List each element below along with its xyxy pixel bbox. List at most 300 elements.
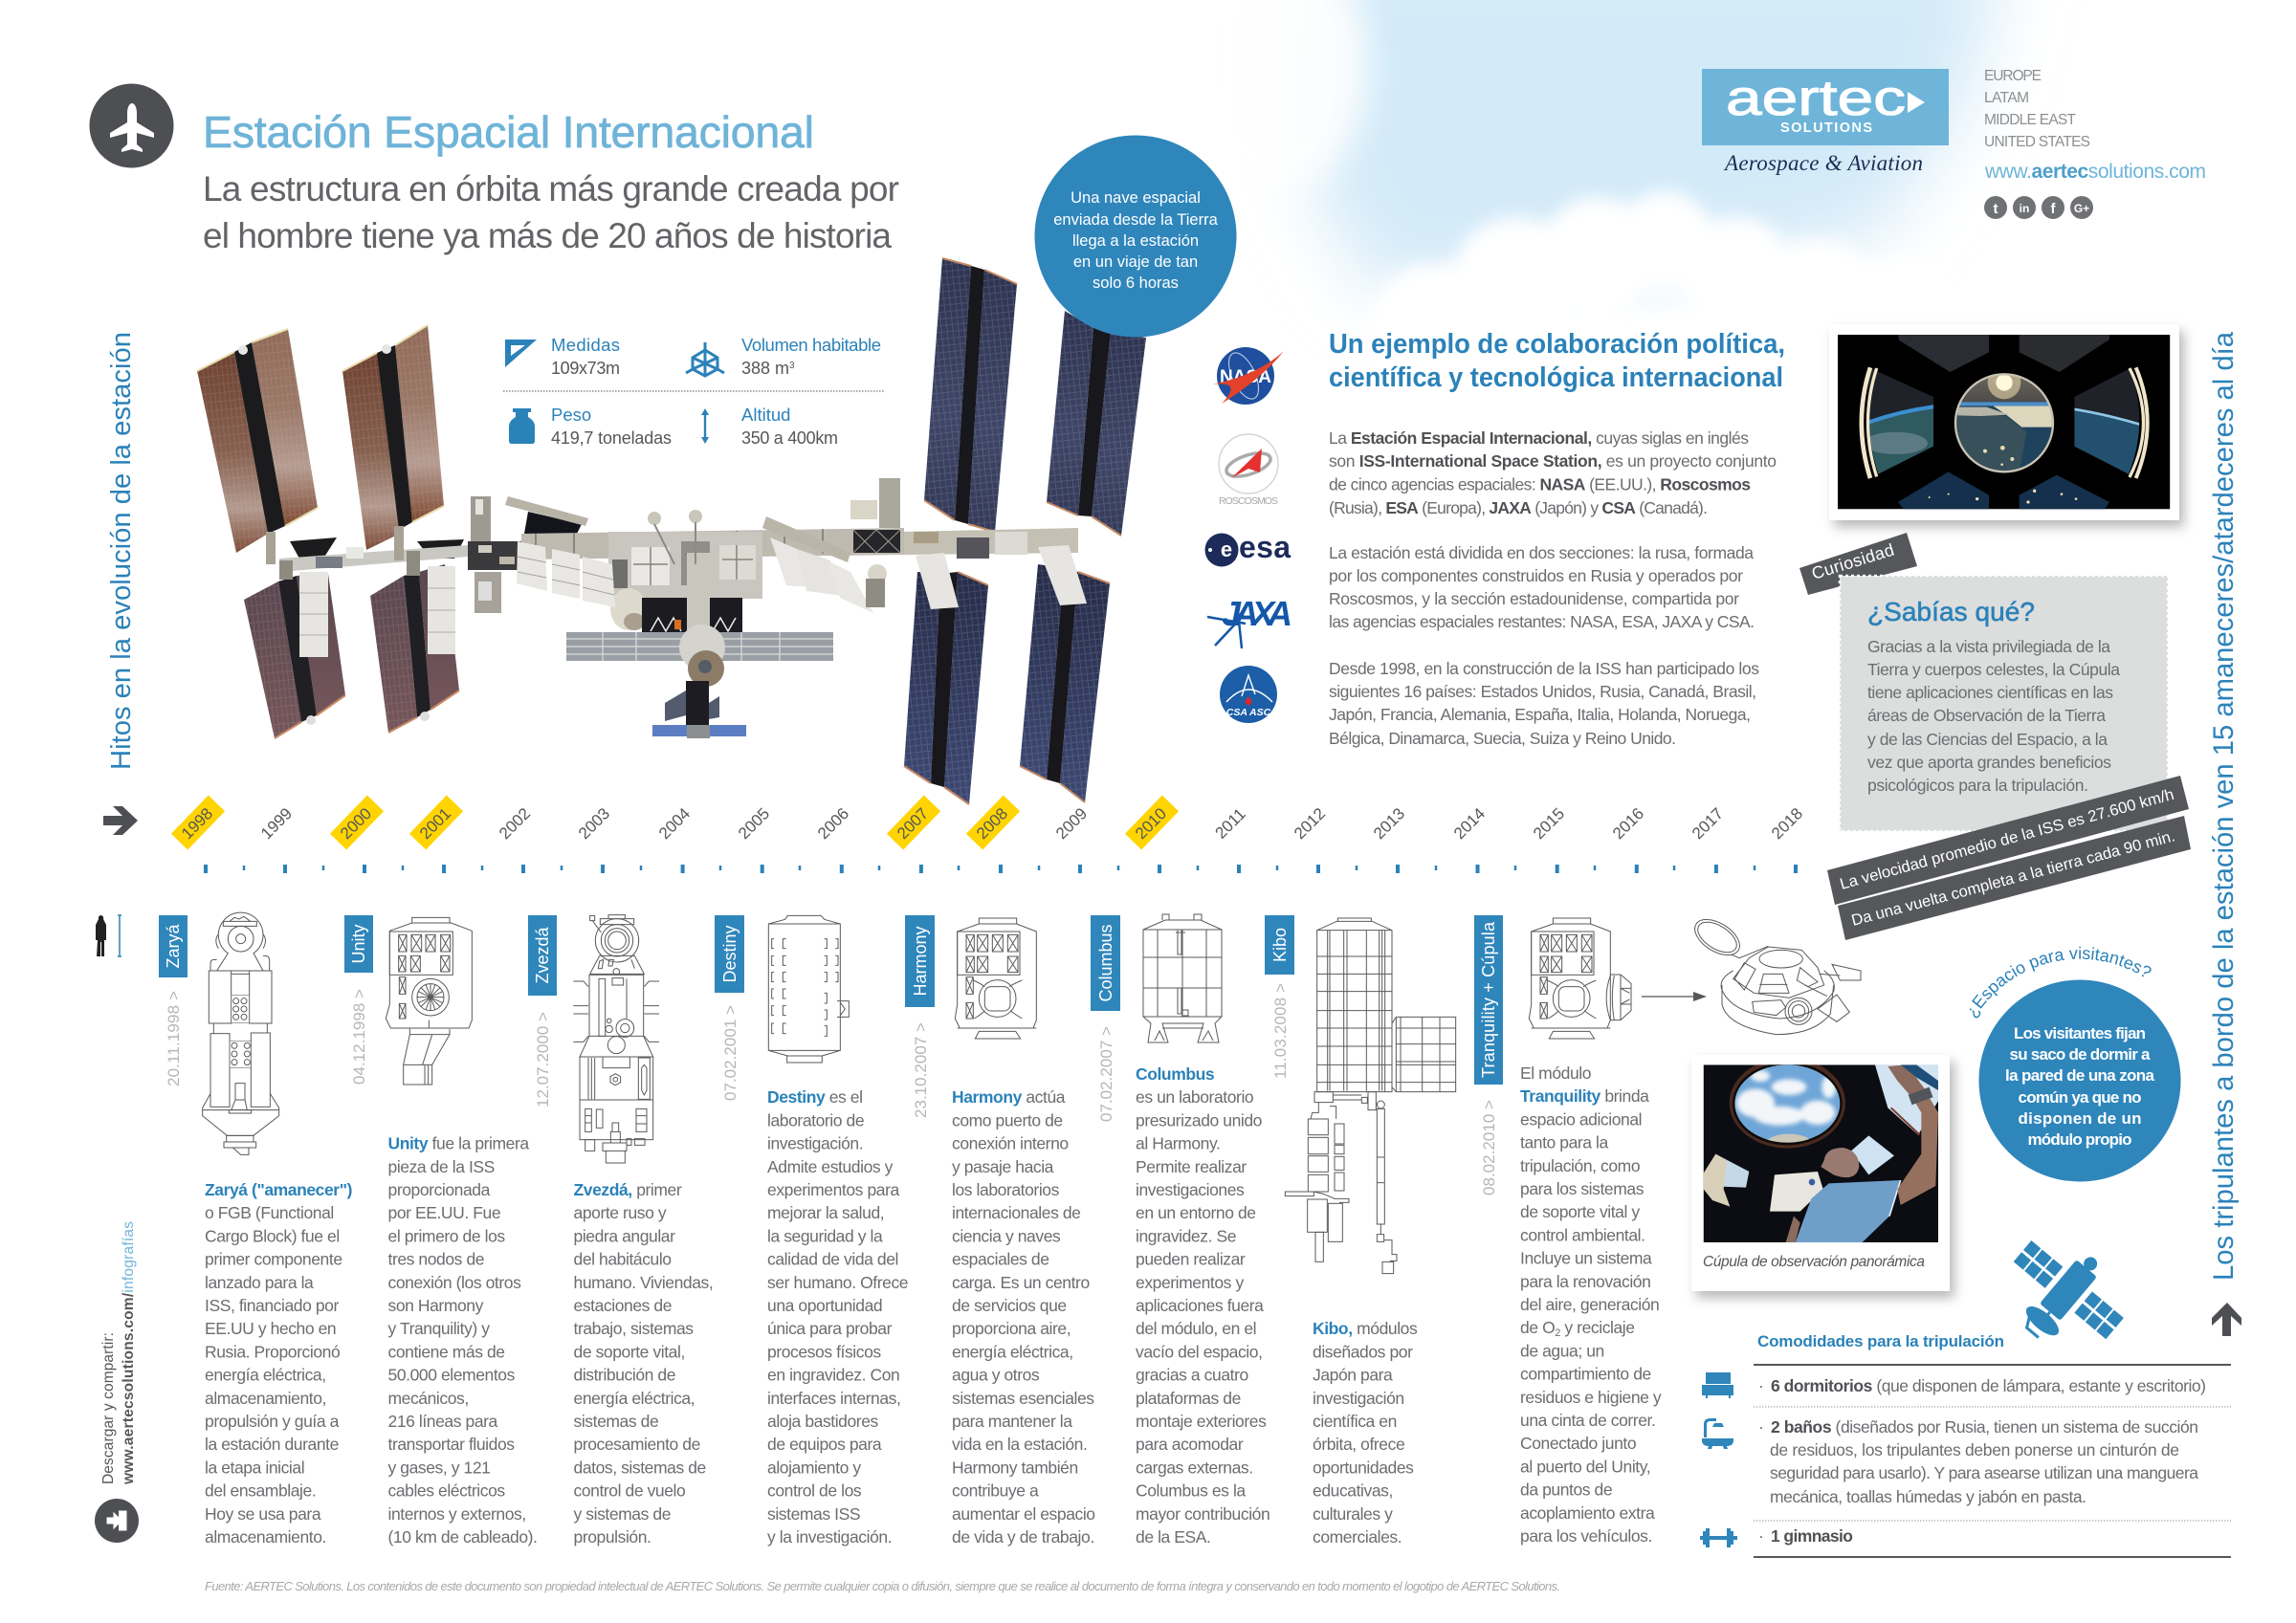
text: Unity: el primero de los [388,1226,505,1245]
text: Harmony: para mantener la [952,1412,1072,1431]
text: Harmony: los laboratorios [952,1180,1060,1199]
date: 08.02.2010 > [1480,1100,1498,1195]
banner: orbit period: Da una vuelta completa a la tierra cada 90 min. [1849,827,2176,930]
text block: about the station: (Rusia), ESA (Europa), JAXA (Japón) y CSA (Canadá). [1329,498,1708,517]
logo: Roscosmos [1219,434,1278,507]
text: Harmony: Harmony también [952,1458,1078,1477]
year labels: 2005 [735,804,773,843]
text: Columbus: Columbus [1136,1064,1215,1084]
banner: orbital speed: La velocidad promedio de la ISS es 27.600 km/h [1838,786,2175,893]
text: Columbus: gracias a cuatro [1136,1366,1248,1385]
tick marks [206,865,1796,873]
logo: ESA [1205,530,1291,566]
date: 07.02.2001 > [721,1005,740,1101]
vertical heading: milestones: Hitos en la evolución de la estación [106,332,137,770]
text: Unity: cables eléctricos [388,1481,505,1501]
module: Kibo [1265,915,1456,1546]
text block: about the station: de cinco agencias espaciales: NASA (EE.UU.), Roscosmos [1329,474,1751,493]
stat: altitude: 350 a 400km [741,428,838,448]
drawing: Zvezdá module [573,915,659,1163]
text: Zvezdá: del habitáculo [574,1250,672,1269]
text: Zvezdá: y sistemas de [574,1504,671,1524]
icon: weight [509,408,535,444]
year labels: 2009 [1052,804,1091,843]
icon: altitude arrow [701,408,709,444]
module: Columbus [1091,914,1269,1546]
text: Kibo: educativas, [1313,1481,1393,1501]
solar array: lower left 1 [244,574,345,738]
text: Unity: por EE.UU. Fue [388,1203,500,1222]
label: Harmony [905,915,935,1007]
text: Zaryá: la etapa inicial [205,1458,304,1477]
text: Unity: (10 km de cableado). [388,1527,538,1546]
background: sky and clouds [1177,0,2009,430]
text: Destiny: una oportunidad [767,1296,882,1315]
text: Unity: internos y externos, [388,1504,526,1524]
title: Estación Espacial Internacional [203,107,814,157]
drawing: Cúpula [1689,912,1861,1035]
subtitle [203,169,899,255]
date: 07.02.2007 > [1097,1026,1115,1122]
logo: NASA: NASA [1220,367,1271,387]
logo: aertec solutions [1702,69,1949,175]
text: Tranquility: al puerto del Unity, [1520,1457,1650,1476]
text: Kibo: culturales y [1313,1504,1393,1524]
logo: NASA [1212,347,1284,405]
solar array: lower right 1 [904,572,988,804]
date: 12.07.2000 > [534,1012,552,1108]
text: Unity: tres nodos de [388,1250,484,1269]
text: Harmony: vida en la estación. [952,1435,1087,1454]
panel: crew amenities [1700,1332,2231,1557]
icon: bath [1702,1418,1733,1449]
text: Destiny: de equipos para [767,1435,882,1454]
callout: visitors: común ya que no [2019,1088,2141,1107]
text: Unity: pieza de la ISS [388,1157,495,1176]
text: Kibo: oportunidades [1313,1458,1414,1477]
text: Destiny: investigación. [767,1134,863,1153]
module: Tranquility and Cúpula [1474,915,1662,1546]
label: Unity [344,915,373,973]
text: Columbus: experimentos y [1136,1273,1244,1292]
stat: weight [551,405,672,448]
text: Destiny: única para probar [767,1319,893,1338]
text: Zaryá: Zaryá ("amanecer") [205,1180,352,1199]
drawing: Harmony node [955,918,1036,1039]
date: 23.10.2007 > [912,1022,930,1118]
text: Destiny: calidad de vida del [767,1250,898,1269]
text: Zaryá: primer componente [205,1250,342,1269]
social icons: in [2020,202,2029,215]
icon: download badge [95,1499,139,1543]
text: Destiny: la seguridad y la [767,1226,883,1245]
subtitle: el hombre tiene ya más de 20 años de historia [203,216,892,255]
text: Tranquility: de soporte vital y [1520,1202,1640,1221]
photo card: cupola window view [1829,324,2179,520]
drawing: Tranquility node with cupola [1529,918,1631,1039]
year labels: 2007 [894,804,932,843]
solar array: lower right 2 [1020,564,1110,802]
text: Destiny: y la investigación. [767,1527,892,1546]
label: Zaryá [159,915,188,977]
year labels: 2008 [973,804,1011,843]
text: Zvezdá: energía eléctrica, [574,1389,695,1408]
solar array: upper left 1 [197,329,318,553]
text: Zvezdá: propulsión. [574,1527,651,1546]
module: Zaryá [159,912,352,1546]
callout: visitors: disponen de un [2019,1109,2141,1128]
logo: CSA: CSA ASC [1226,707,1271,718]
tag: curiosity [1799,533,1917,595]
year labels: 2016 [1609,804,1647,843]
text: Columbus: en un entorno de [1136,1203,1256,1222]
logo: aertec solutions: aertec [1726,71,1906,126]
social icons [1984,196,2093,219]
year labels: 1999 [257,804,296,843]
callout: journey time: llega a la estación [1072,232,1199,250]
year labels: 2013 [1370,804,1408,843]
callout: journey time: en un viaje de tan [1073,253,1198,271]
callout: journey time: Una nave espacial [1071,189,1201,207]
text: Columbus: mayor contribución [1136,1504,1269,1524]
drawing: Zaryá module [203,912,279,1154]
stat: altitude [741,405,838,448]
text: Columbus: pueden realizar [1136,1250,1246,1269]
panel: did you know [1840,576,2168,831]
text: Zvezdá: distribución de [574,1366,675,1385]
divider [503,390,884,392]
callout: journey time: solo 6 horas [1093,274,1179,292]
text: Tranquility: para los vehículos. [1520,1526,1652,1546]
icon: set square [505,340,537,367]
text: Tranquility: y reciclaje [1560,1318,1635,1337]
section heading: collaboration [1329,329,1785,393]
callout: journey time [1035,136,1236,337]
regions list: LATAM [1984,90,2029,106]
text: Columbus: al Harmony. [1136,1134,1220,1153]
text: Zvezdá: sistemas de [574,1412,658,1431]
text: Kibo: Japón para [1313,1366,1393,1385]
icon: dumbbell [1700,1528,1737,1547]
stat: measurements [551,335,620,378]
text: Tranquility: acoplamiento extra [1520,1503,1655,1523]
text: Harmony: Harmony actúa [952,1087,1065,1107]
text: Zaryá: energía eléctrica, [205,1366,326,1385]
text: Tranquility: da puntos de [1520,1480,1612,1500]
arrow: up [2212,1303,2241,1336]
social icons: G+ [2074,202,2089,215]
item: bathrooms: mecánica, toallas húmedas y jabón en pasta. [1770,1487,2086,1506]
logo: aertec solutions: Aerospace & Aviation [1723,151,1923,175]
text: Kibo: órbita, ofrece [1313,1435,1404,1454]
text: Tranquility: Tranquility brinda [1520,1086,1648,1106]
text: Destiny: Admite estudios y [767,1157,894,1176]
social icons: f [2051,201,2057,217]
text block: about the station: Japón, Francia, Alemania, España, Italia, Holanda, Noruega, [1329,705,1751,724]
text: Tranquility: espacio adicional [1520,1109,1642,1129]
date: 20.11.1998 > [165,991,183,1086]
text: Zvezdá: de soporte vital, [574,1342,685,1361]
drawing: Kibo laboratory [1285,918,1456,1274]
regions list: MIDDLE EAST [1984,112,2077,128]
truss and modules [266,478,1087,738]
solar array: lower left 2 [370,564,459,733]
text: Harmony: internacionales de [952,1203,1080,1222]
text: Columbus: del módulo, en el [1136,1319,1256,1338]
regions list [1984,68,2090,150]
stat: habitable volume: Volumen habitable [741,335,881,355]
label: Kibo [1265,915,1294,975]
item: bathrooms: de residuos, los tripulantes deben ponerse un cinturón de [1770,1440,2179,1459]
label: Destiny: Destiny [720,925,740,983]
text: Columbus: Permite realizar [1136,1157,1247,1176]
text: Harmony: energía eléctrica, [952,1342,1073,1361]
item: bathrooms: 2 baños (diseñados por Rusia, tienen un sistema de succión [1771,1417,2198,1437]
text: Zaryá: Rusia. Proporcionó [205,1342,340,1361]
text: Zvezdá: procesamiento de [574,1435,700,1454]
text: Destiny: en ingravidez. Con [767,1366,899,1385]
text: Columbus: Columbus es la [1136,1481,1246,1501]
year markers [171,796,1179,849]
text: Destiny: ser humano. Ofrece [767,1273,908,1292]
label: Columbus: Columbus [1096,924,1115,1002]
year labels: 2018 [1768,804,1806,843]
stat: measurements: Medidas [551,335,620,355]
date: 11.03.2008 > [1271,983,1290,1079]
text: Kibo: investigación [1313,1389,1404,1408]
icon: human scale [96,915,121,956]
text: Unity: mecánicos, [388,1389,469,1408]
text: Tranquility: Conectado junto [1520,1434,1636,1453]
date: 04.12.1998 > [350,989,368,1085]
text: Tranquility: control ambiental. [1520,1225,1645,1244]
download link [95,1221,139,1543]
text: Unity: y gases, y 121 [388,1458,490,1477]
text: download and share: www.aertecsolutions.com/infografías [121,1221,137,1485]
key figures panel [503,335,884,448]
text: Destiny: alojamiento y [767,1458,861,1477]
text: Harmony: como puerto de [952,1110,1063,1130]
label: Kibo: Kibo [1270,928,1290,962]
text: Destiny: Destiny es el [767,1087,863,1107]
text: Unity: 216 líneas para [388,1412,498,1431]
text: Zaryá: almacenamiento. [205,1527,326,1546]
text block: about the station: La estación está dividida en dos secciones: la rusa, formada [1329,543,1754,562]
item: bathrooms [1758,1417,2198,1506]
label: Columbus [1091,915,1120,1011]
label: Unity: Unity [349,924,368,964]
text: Tranquility: El módulo [1520,1064,1591,1083]
text: Unity: transportar fluidos [388,1435,515,1454]
text: Destiny: control de los [767,1481,862,1501]
text: Unity: conexión (los otros [388,1273,521,1292]
text: Tranquility: compartimiento de [1520,1365,1651,1384]
logo: CSA [1220,666,1277,723]
section heading: collaboration: científica y tecnológica internacional [1329,362,1783,393]
text: Unity: son Harmony [388,1296,484,1315]
stat: weight: 419,7 toneladas [551,428,672,448]
year labels: 2006 [814,804,852,843]
logo: aertec solutions: SOLUTIONS [1780,121,1872,136]
text: Tranquility: para los sistemas [1520,1179,1645,1198]
drawing: Destiny laboratory [768,915,849,1063]
text: Zaryá: Cargo Block) fue el [205,1226,340,1245]
text: did you know: Tierra y cuerpos celestes, la Cúpula [1867,660,2120,679]
year labels: 2003 [575,804,613,843]
text: download and share [100,1221,137,1485]
label: Zvezdá: Zvezdá [533,926,552,984]
text: Tranquility: de O [1520,1318,1635,1339]
solar array: upper right 1 [924,258,1017,532]
year labels: 2010 [1132,804,1170,843]
text: Columbus: es un laboratorio [1136,1087,1253,1107]
text: Unity: Unity fue la primera [388,1134,529,1153]
tag: curiosity: Curiosidad [1809,540,1896,583]
text: Unity: contiene más de [388,1342,505,1361]
text: Zvezdá: piedra angular [574,1226,675,1245]
text: Tranquility: residuos e higiene y [1520,1388,1662,1407]
text block: about the station: Bélgica, Dinamarca, Suecia, Suiza y Reino Unido. [1329,729,1676,748]
text: Harmony: conexión interno [952,1134,1069,1153]
callout: visitors: su saco de dormir a [2009,1045,2151,1064]
callout: journey time: enviada desde la Tierra [1053,211,1219,229]
year labels: 2017 [1689,804,1727,843]
module: Harmony [905,915,1095,1546]
text: Destiny: interfaces internas, [767,1389,900,1408]
text: Zvezdá: aporte ruso y [574,1203,667,1222]
year labels: 2002 [496,804,534,843]
text: Zvezdá: trabajo, sistemas [574,1319,694,1338]
label: Zaryá: Zaryá [164,924,183,969]
module: Unity [344,915,538,1546]
text block: about the station: La Estación Espacial Internacional, cuyas siglas en inglés [1329,428,1749,448]
label: Tranquility + Cúpula: Tranquility + Cúpula [1479,921,1498,1078]
heading: did you know: ¿Sabías qué? [1867,597,2035,626]
callout: visitors: Los visitantes fijan [2014,1024,2146,1042]
heading: amenities: Comodidades para la tripulación [1757,1332,2004,1350]
text: Zvezdá: control de vuelo [574,1481,685,1501]
text: Destiny: laboratorio de [767,1110,864,1130]
stat: habitable volume: 388 m [741,359,789,378]
text: Harmony: de servicios que [952,1296,1067,1315]
arrow: timeline direction [103,806,138,835]
year labels: 1998 [178,804,216,843]
text: Unity: y Tranquility) y [388,1319,490,1338]
text block: about the station: Desde 1998, en la construcción de la ISS han participado los [1329,659,1759,678]
text: Harmony: agua y otros [952,1366,1040,1385]
label: Zvezdá [528,915,557,996]
item: bathrooms: seguridad para usarlo). Y para asearse utilizan una manguera [1770,1463,2198,1482]
icon: habitable volume [686,342,724,376]
text: Zvezdá: datos, sistemas de [574,1458,706,1477]
text: Tranquility: de agua; un [1520,1341,1604,1360]
text: Destiny: sistemas ISS [767,1504,860,1524]
text: Kibo: científica en [1313,1412,1397,1431]
callout: visitors [1978,979,2181,1182]
label: Tranquility + Cúpula [1474,915,1503,1085]
text: Destiny: procesos físicos [767,1342,881,1361]
text: Zaryá: del ensamblaje. [205,1481,316,1501]
photo card: astronaut in the Cúpula [1691,1055,1950,1291]
text: did you know: y de las Ciencias del Espacio, a la [1867,730,2108,749]
text: Columbus: aplicaciones fuera [1136,1296,1264,1315]
stat: habitable volume [741,335,881,378]
timeline [171,796,1806,873]
stat: altitude: Altitud [741,405,790,425]
text: Tranquility: una cinta de correr. [1520,1411,1655,1430]
text: Tranquility: 2 [1555,1327,1560,1339]
stat: weight: Peso [551,405,591,425]
year labels: 2004 [655,804,694,843]
text block: about the station: son ISS-International Space Station, es un proyecto conjunto [1329,451,1777,471]
text: Harmony: proporciona aire, [952,1319,1071,1338]
social icons: t [1994,201,1998,217]
text: Kibo: diseñados por [1313,1342,1413,1361]
text: Destiny: aloja bastidores [767,1412,879,1431]
text: Kibo: Kibo, módulos [1313,1319,1417,1338]
text: did you know: psicológicos para la tripulación. [1867,776,2088,795]
arrow: module to cupola [1642,992,1707,1001]
item: gym: · [1758,1526,1764,1546]
text: Zaryá: ISS, financiado por [205,1296,339,1315]
item: bedrooms: 6 dormitorios (que disponen de lámpara, estante y escritorio) [1771,1376,2206,1395]
text: Tranquility: del aire, generación [1520,1295,1659,1314]
logo: ESA: e [1221,537,1232,561]
item: gym: 1 gimnasio [1771,1526,1853,1546]
text: Destiny: experimentos para [767,1180,899,1199]
text: Harmony: carga. Es un centro [952,1273,1090,1292]
year labels: 2001 [416,804,454,843]
year labels: 2012 [1291,804,1329,843]
text: Columbus: de la ESA. [1136,1527,1211,1546]
stat: measurements: 109x73m [551,359,620,378]
text: Zvezdá: Zvezdá, primer [574,1180,681,1199]
text: Zaryá: almacenamiento, [205,1389,326,1408]
label: Destiny [715,915,744,993]
logo: ESA: esa [1239,530,1291,564]
text: Tranquility: tripulación, como [1520,1156,1640,1175]
callout: visitors: la pared de una zona [2005,1066,2155,1085]
text: did you know: tiene aplicaciones científicas en las [1867,683,2113,702]
curved heading: space for visitors: ¿Espacio para visitantes? [1969,947,2152,1018]
text: Columbus: ingravidez. Se [1136,1226,1236,1245]
year labels: 2000 [337,804,375,843]
text: Columbus: montaje exteriores [1136,1412,1267,1431]
subtitle: La estructura en órbita más grande creada por [203,169,899,208]
text: download and share: Descargar y compartir: [100,1332,117,1484]
year labels: 2015 [1530,804,1568,843]
text: Tranquility: tanto para la [1520,1133,1609,1152]
text: Zaryá: propulsión y guía a [205,1412,340,1431]
vertical heading: crew sunrises: Los tripulantes a bordo de la estación ven 15 amaneceres/atardeceres al día [2208,332,2240,1281]
text: Zvezdá: estaciones de [574,1296,672,1315]
year labels: 2011 [1211,804,1249,843]
text: Harmony: y pasaje hacia [952,1157,1054,1176]
text block: about the station [1329,428,1777,748]
solar array: upper right 2 [1047,311,1146,536]
item: bedrooms: · [1758,1376,1764,1395]
text block: about the station: siguientes 16 países: Estados Unidos, Rusia, Canadá, Brasil, [1329,682,1756,701]
text: Harmony: aumentar el espacio [952,1504,1095,1524]
illustration: International Space Station [197,258,1146,804]
icon: airplane badge [90,84,174,168]
text: Zaryá: Hoy se usa para [205,1504,321,1524]
text: Columbus: vacío del espacio, [1136,1342,1263,1361]
text: did you know: Gracias a la vista privilegiada de la [1867,637,2110,656]
text: Harmony: ciencia y naves [952,1226,1061,1245]
year labels [178,804,1806,843]
text block: about the station: Roscosmos, y la sección estadounidense, compartida por [1329,589,1739,608]
